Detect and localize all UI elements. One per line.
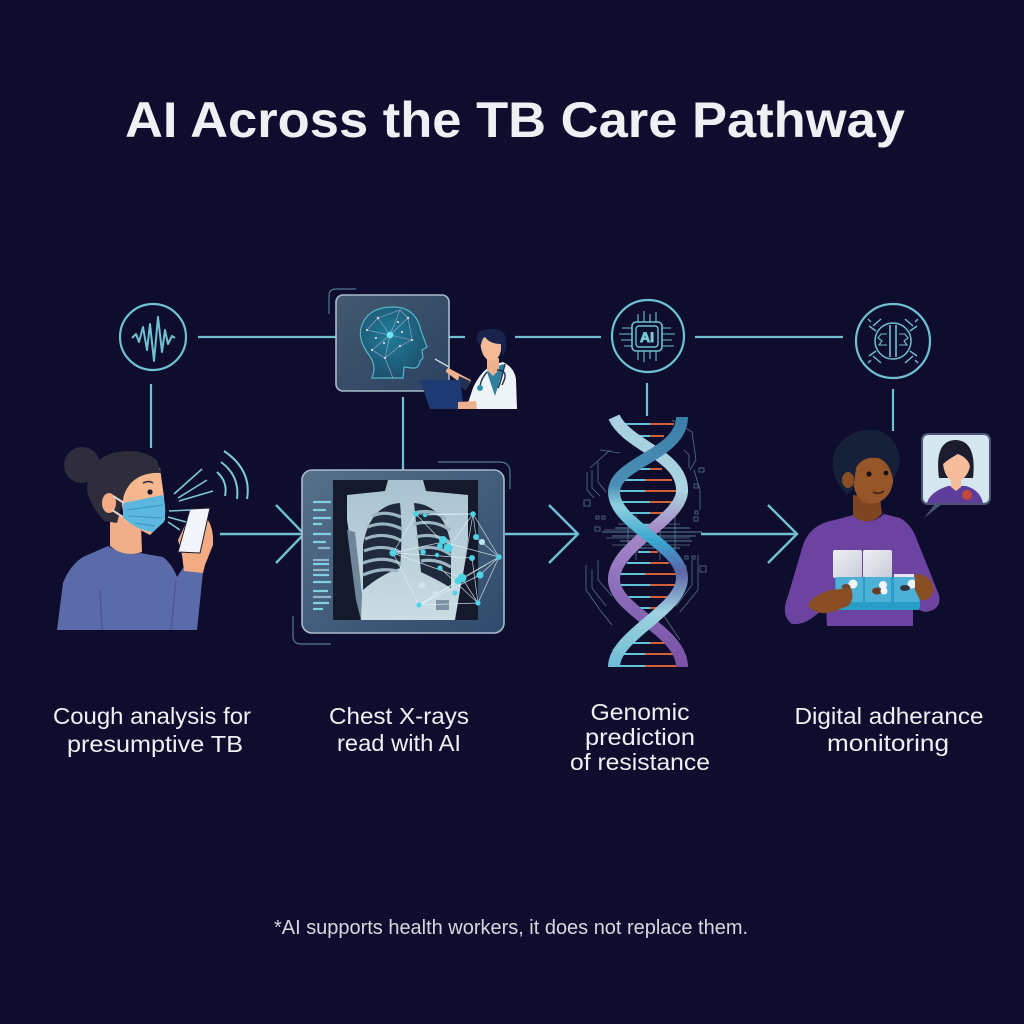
- icon: circuit brain: [856, 304, 930, 378]
- caption: digital adherence: [794, 703, 984, 756]
- pointer and hand: [435, 359, 449, 367]
- right lung: [414, 503, 451, 588]
- illustration: patient holding pill organiser: [785, 430, 939, 626]
- hands: [808, 588, 852, 613]
- white coat: [466, 362, 517, 409]
- connector network lines: [151, 337, 893, 478]
- caption: digital adherence: Digital adherance: [794, 703, 984, 729]
- caption: cough analysis: [53, 703, 251, 757]
- caption: digital adherence: monitoring: [827, 730, 949, 756]
- icon: sound wave: [120, 304, 186, 370]
- phone: [178, 508, 210, 553]
- icon: head with neural net: [360, 307, 427, 378]
- arrow: x-ray to genomics: [505, 505, 578, 563]
- caption: genomic prediction: Genomic: [590, 699, 690, 725]
- panel: brain scan: [329, 289, 449, 391]
- hair: [87, 451, 161, 523]
- hair: [833, 430, 900, 495]
- illustration: woman with mask coughing into phone: [57, 447, 248, 630]
- left lung: [363, 503, 402, 590]
- caption: genomic prediction: of resistance: [570, 749, 710, 775]
- video call speech bubble: [922, 434, 990, 518]
- pill box: [835, 577, 920, 610]
- pill box lids: [833, 550, 862, 578]
- circuit traces: [584, 420, 706, 650]
- caption: cough analysis: Cough analysis for: [53, 703, 251, 729]
- hair bun: [64, 447, 100, 483]
- title: AI Across the TB Care Pathway: [125, 92, 905, 148]
- laptop: [420, 380, 464, 409]
- icon: AI chip: AI: [640, 329, 654, 345]
- base pair rungs: [614, 424, 682, 666]
- helix strands: [614, 417, 682, 667]
- neck: [853, 495, 882, 522]
- eye: [147, 489, 153, 495]
- nurse portrait: [927, 440, 983, 503]
- arm and hand: [178, 517, 213, 573]
- sweater: [785, 514, 939, 626]
- illustration: DNA helix with circuit background: [584, 417, 706, 667]
- caption: chest x-rays: [329, 703, 469, 756]
- neural network overlay: [389, 511, 502, 608]
- body: [57, 546, 203, 630]
- cough lines and sound arcs: [168, 451, 248, 530]
- x-ray image: [333, 480, 478, 620]
- caption: chest x-rays: Chest X-rays: [329, 703, 469, 729]
- footnote: *AI supports health workers, it does not replace them.: [274, 917, 748, 939]
- neck: [110, 512, 142, 554]
- neck and face: [487, 358, 499, 376]
- hair: [476, 329, 506, 356]
- caption: chest x-rays: read with AI: [337, 730, 461, 756]
- stethoscope: [480, 364, 505, 388]
- face: [120, 468, 165, 535]
- caption: cough analysis: presumptive TB: [67, 731, 243, 757]
- panel: chest x-ray monitor: [293, 462, 510, 644]
- illustration: doctor with laptop: [420, 329, 517, 409]
- arrow: genomics to adherence: [701, 505, 797, 563]
- ear: [102, 493, 116, 513]
- arrow: cough to x-ray: [220, 505, 304, 563]
- caption: genomic prediction: prediction: [585, 724, 695, 750]
- report text lines: [313, 502, 331, 609]
- icon: AI chip: [612, 300, 684, 372]
- face: [852, 452, 894, 504]
- face mask: [123, 495, 165, 532]
- caption: genomic prediction: [570, 699, 710, 775]
